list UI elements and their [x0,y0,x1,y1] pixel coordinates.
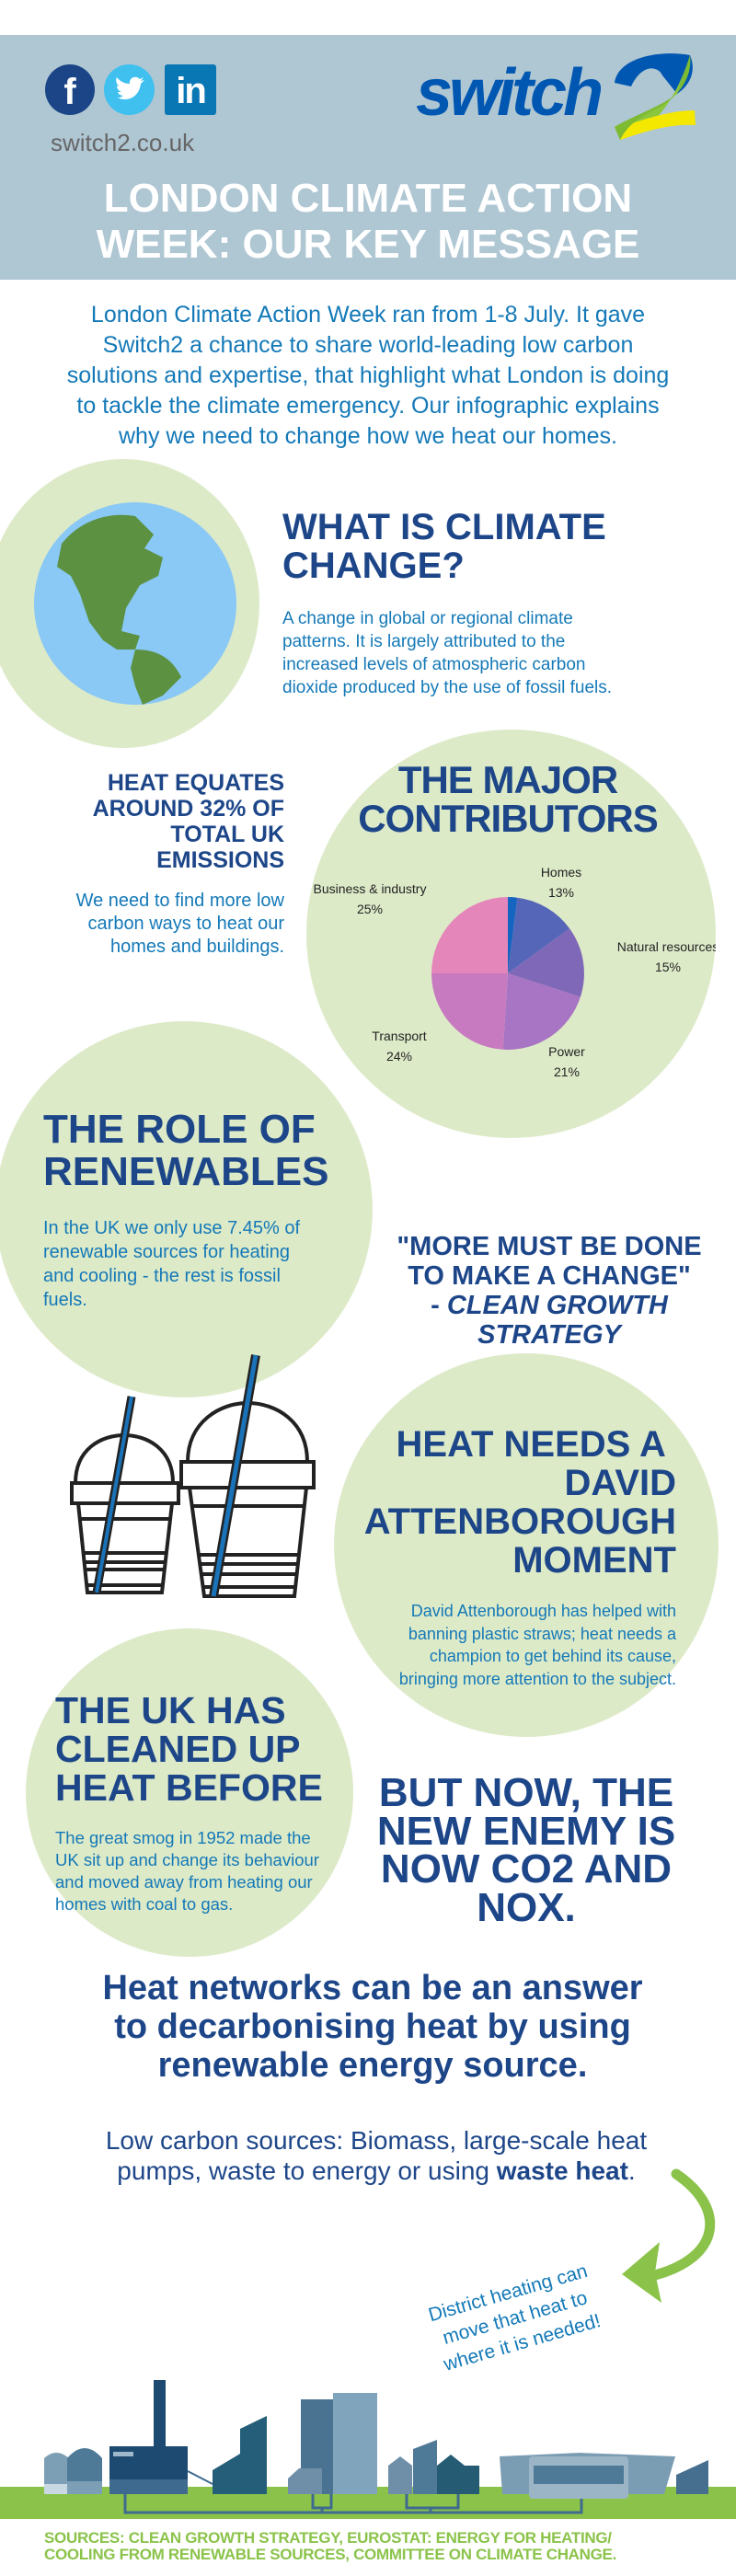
text: low carbon sources: Low carbon sources: Biomass, large-scale heat [106,2126,647,2155]
quote: clean growth strategy: "MORE MUST BE DONE [397,1232,702,1261]
text: attenborough: bringing more attention to the subject. [399,1669,676,1687]
text: low carbon ways: homes and buildings. [110,937,284,957]
heading: what is climate change: CHANGE? [282,546,465,586]
text: climate change definition: patterns. It is largely attributed to the [282,632,565,651]
text: climate change definition: A change in global or regional climate [282,609,573,628]
text: climate change definition: dioxide produced by the use of fossil fuels. [282,678,612,697]
text: attenborough: David Attenborough has helped with [411,1602,676,1620]
arrow: curved green [622,2169,716,2303]
title: LONDON CLIMATE ACTION [104,176,632,221]
website text: switch2.co.uk [51,129,194,156]
panel: role of renewables circle [0,1021,373,1397]
text: attenborough: banning plastic straws; heat needs a [408,1625,676,1643]
text: great smog: UK sit up and change its behaviour [55,1850,319,1869]
text: renewables share: renewable sources for heating [43,1242,290,1262]
heading: heat networks: Heat networks can be an answer [102,1969,643,2007]
quote: clean growth strategy: TO MAKE A CHANGE" [408,1261,691,1291]
logo: switch2 [416,53,696,140]
pie chart: Power [548,1044,585,1059]
heading: the major contributors [358,758,658,840]
heading: role of renewables: THE ROLE OF [43,1107,316,1152]
heading: heat equates: TOTAL UK [170,822,284,847]
panel: uk cleaned up circle [26,1628,353,1957]
heading: heat networks: to decarbonising heat by using [114,2007,631,2046]
quote: clean growth strategy [397,1232,702,1350]
text: low carbon ways [75,891,284,957]
text: climate change definition [282,609,612,697]
illustration: city with heat network [0,2380,736,2519]
pie chart: Business & industry [314,881,426,896]
intro text: why we need to change how we heat our homes. [119,423,617,449]
heading: new enemy [377,1770,675,1930]
pie chart: 21% [554,1064,580,1079]
intro text: London Climate Action Week ran from 1-8 July. It gave [91,302,645,328]
title: WEEK: OUR KEY MESSAGE [97,222,639,267]
intro text: Switch2 a chance to share world-leading low carbon [103,332,633,358]
text: low carbon ways: carbon ways to heat our [88,914,284,934]
text: renewables share: fuels. [43,1290,87,1310]
title [96,176,639,267]
callout: district heating [426,2260,603,2375]
heading: heat equates [93,770,284,873]
text: great smog: homes with coal to gas. [55,1894,233,1914]
heading: role of renewables: RENEWABLES [43,1149,328,1194]
heading: david attenborough moment: HEAT NEEDS A [397,1424,666,1465]
pie chart: 25% [357,902,383,916]
sources footer: SOURCES: CLEAN GROWTH STRATEGY, EUROSTAT: ENERGY FOR HEATING/ [44,2529,612,2547]
heading: what is climate change: WHAT IS CLIMATE [282,507,606,547]
text: great smog: The great smog in 1952 made the [55,1828,311,1847]
heading: heat equates: HEAT EQUATES [108,770,284,796]
heading: heat equates: EMISSIONS [156,847,284,873]
intro text: to tackle the climate emergency. Our infographic explains [76,393,660,419]
pie chart: 24% [386,1049,412,1064]
text: renewables share: and cooling - the rest is fossil [43,1266,281,1286]
pie chart: Homes [541,865,581,880]
quote: clean growth strategy: - CLEAN GROWTH [431,1291,668,1320]
panel: attenborough circle [334,1353,719,1737]
icon: earth [34,502,236,705]
heading: uk has cleaned up heat: THE UK HAS [55,1689,286,1731]
heading: what is climate change [282,507,606,586]
text: attenborough: champion to get behind its cause, [430,1647,676,1665]
heading: the major contributors: CONTRIBUTORS [358,797,658,840]
icon: linkedin: in [176,71,205,111]
heading: heat networks [102,1969,643,2085]
heading: uk has cleaned up heat: HEAT BEFORE [55,1766,323,1809]
heading: david attenborough moment: MOMENT [512,1540,676,1581]
pie chart [314,865,716,1079]
callout: district heating: move that heat to [441,2287,590,2349]
quote: clean growth strategy: STRATEGY [477,1320,621,1350]
heading: new enemy: NOW CO2 AND [381,1846,672,1892]
heading: the major contributors: THE MAJOR [398,758,617,801]
pie chart: 13% [548,885,574,900]
heading: david attenborough moment: DAVID [565,1463,676,1503]
heading: heat equates: AROUND 32% OF [93,796,284,822]
heading: david attenborough moment [364,1424,676,1581]
heading: new enemy: BUT NOW, THE [379,1770,673,1815]
header band [0,35,736,280]
text: renewables share: In the UK we only use 7.45% of [43,1218,300,1238]
callout: district heating: where it is needed! [442,2310,603,2375]
icon: facebook: f [63,72,76,112]
sources footer: COOLING FROM RENEWABLE SOURCES, COMMITTEE ON CLIMATE CHANGE. [44,2546,616,2563]
text: renewables share [43,1218,300,1310]
icon: facebook [45,64,95,115]
pie chart: Transport [372,1029,427,1043]
text: climate change definition: increased levels of atmospheric carbon [282,655,586,674]
pie chart: 15% [655,960,681,974]
heading: new enemy: NOX. [477,1885,576,1930]
callout: district heating: District heating can [426,2260,590,2326]
text: great smog: and moved away from heating our [55,1872,313,1892]
heading: uk has cleaned up heat: CLEANED UP [55,1728,301,1770]
pie chart: Natural resources [617,939,716,954]
text: attenborough [399,1602,676,1688]
heading: role of renewables [43,1107,328,1194]
text: low carbon sources: pumps, waste to energy or using waste heat. [117,2156,636,2185]
heading: new enemy: NEW ENEMY IS [377,1809,675,1854]
text: low carbon sources [106,2126,647,2185]
panel: climate change circle [0,459,259,748]
intro text: solutions and expertise, that highlight what London is doing [67,362,669,388]
icon: linkedin [165,64,216,115]
intro text [67,302,669,449]
icon: plastic cups with straws [70,1354,316,1598]
icon: twitter [104,64,155,115]
panel: major contributors circle [306,730,716,1138]
text: low carbon ways: We need to find more low [76,891,284,911]
logo: switch2: switch [416,56,600,130]
heading: david attenborough moment: ATTENBOROUGH [364,1501,676,1542]
text: great smog [55,1828,319,1914]
sources footer [44,2529,616,2563]
heading: uk has cleaned up heat [55,1689,323,1809]
heading: heat networks: renewable energy source. [158,2046,587,2085]
